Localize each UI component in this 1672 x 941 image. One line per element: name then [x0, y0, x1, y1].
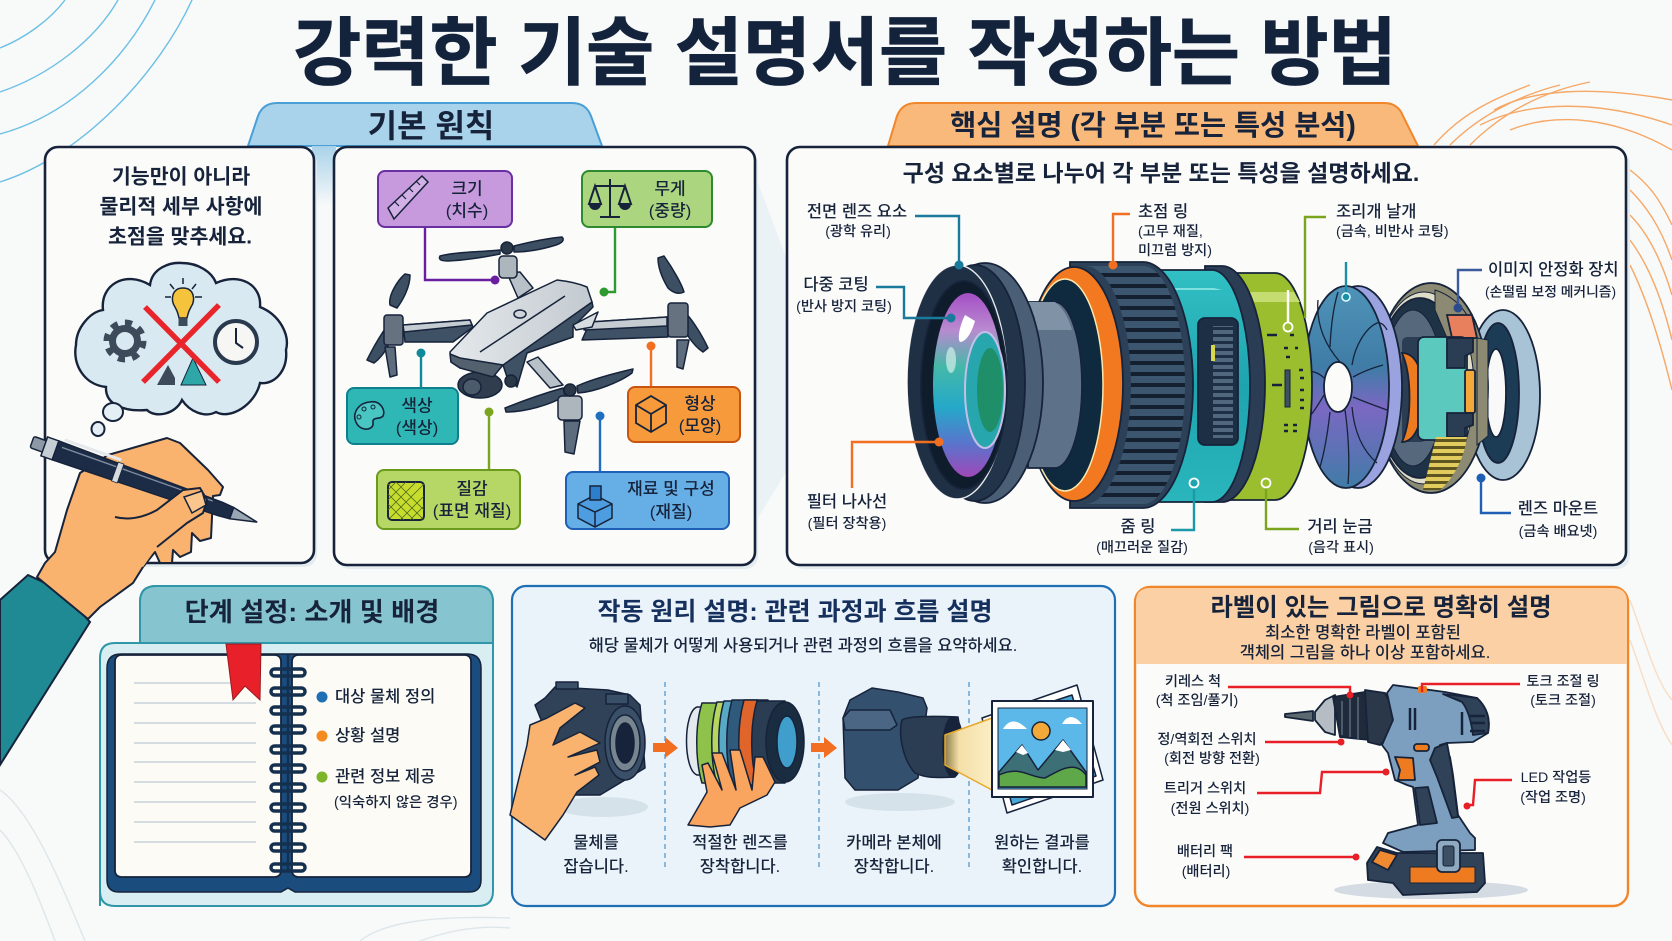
leader: battery	[1244, 854, 1360, 860]
heading band: 객체의 그림을 하나 이상 포함하세요.	[1240, 643, 1490, 662]
text: focus instruction: 물리적 세부 사항에	[99, 196, 263, 218]
leader: mount	[1476, 474, 1511, 513]
leader: trigger	[1257, 768, 1390, 793]
tab: core description	[888, 103, 1418, 146]
leader: direction switch	[1265, 738, 1344, 746]
label: multi coating	[796, 275, 892, 315]
label: lens mount: 렌즈 마운트	[1518, 499, 1598, 518]
label: step 4	[994, 833, 1090, 876]
part: orange filter ring	[1025, 267, 1123, 501]
part: lens mount	[1466, 310, 1540, 480]
leader: stabilizer	[1454, 270, 1482, 312]
text: focus instruction	[99, 166, 263, 248]
label: battery pack: 배터리 팩	[1177, 844, 1233, 860]
part: focus ring	[1070, 262, 1193, 508]
heading band: 최소한 명확한 라벨이 포함된	[1265, 623, 1461, 642]
illustration: hand writing with pen	[0, 430, 262, 765]
label: material: 재료 및 구성	[627, 480, 715, 498]
hand	[37, 438, 223, 619]
leader: torque ring	[1422, 684, 1520, 692]
label: direction switch: (회전 방향 전환)	[1164, 751, 1260, 767]
connector: size	[425, 227, 500, 284]
list: intro items: (익숙하지 않은 경우)	[334, 794, 458, 811]
leader: focus ring	[1108, 214, 1130, 270]
connector: texture	[484, 408, 494, 470]
label: focus ring: 미끄럼 방지)	[1138, 243, 1212, 259]
label: texture: 질감	[456, 480, 488, 498]
label: step 2	[692, 833, 788, 876]
label: filter thread: 필터 나사선	[807, 492, 887, 511]
heading band: 라벨이 있는 그림으로 명확히 설명	[1210, 594, 1552, 622]
text: how it works instruction: 해당 물체가 어떻게 사용되거나 관련 과정의 흐름을 요약하세요.	[589, 637, 1017, 655]
label: step 2: 적절한 렌즈를	[692, 833, 788, 852]
label: shape: (모양)	[679, 416, 721, 436]
label: step 1: 물체를	[573, 833, 619, 852]
arrow: step 1 to 2	[653, 737, 678, 758]
connector: colour	[416, 348, 426, 388]
label: multi coating: 다중 코팅	[803, 275, 869, 294]
illustration: hand attaching lens	[686, 700, 804, 827]
label: torque ring: 토크 조절 링	[1526, 674, 1600, 690]
text: panel instruction: 구성 요소별로 나누어 각 부분 또는 특성을 설명하세요.	[903, 160, 1419, 186]
leader: filter thread	[852, 438, 944, 488]
label: zoom ring	[1096, 517, 1188, 556]
label: multi coating: (반사 방지 코팅)	[796, 299, 892, 315]
body	[503, 302, 593, 387]
label: material: (재질)	[650, 502, 692, 522]
label: torque ring	[1526, 674, 1600, 709]
label: aperture blades: (금속, 비반사 코팅)	[1336, 224, 1449, 240]
label: LED work light: LED 작업등	[1521, 770, 1591, 786]
part: distance scale ring	[1228, 273, 1312, 500]
label: front element: (광학 유리)	[825, 224, 891, 240]
label: size: 크기	[451, 180, 483, 198]
label: weight: (중량)	[649, 202, 691, 220]
label: lens mount	[1518, 499, 1598, 540]
leader: zoom ring	[1171, 478, 1198, 530]
arms	[403, 320, 473, 342]
label: image stabilizer	[1485, 260, 1619, 300]
label: direction switch	[1157, 732, 1260, 767]
illustration: spiral notebook	[107, 644, 481, 892]
label: size	[378, 171, 512, 227]
rear propeller	[439, 250, 500, 261]
connector: material	[596, 412, 604, 472]
tab: core description: 핵심 설명 (각 부분 또는 특성 분석)	[950, 110, 1356, 142]
text: focus instruction: 기능만이 아니라	[112, 166, 250, 188]
icon: thought cloud with crossed abstract ideas	[75, 263, 287, 436]
panel: focus on physical details	[45, 147, 317, 567]
leader: front element	[915, 216, 964, 270]
label: zoom ring: 줌 링	[1121, 517, 1155, 536]
heading band	[1136, 588, 1627, 664]
label: direction switch: 정/역회전 스위치	[1157, 732, 1257, 748]
heading: set the stage	[140, 586, 493, 643]
label: LED work light	[1520, 770, 1591, 806]
label: battery pack	[1177, 844, 1233, 880]
left propeller	[390, 274, 410, 308]
label: distance scale	[1307, 517, 1374, 556]
icon: bookmark	[226, 644, 261, 700]
label: front element: 전면 렌즈 요소	[807, 202, 907, 221]
label: focus ring: (고무 재질,	[1138, 224, 1203, 240]
label: filter thread: (필터 장착용)	[808, 516, 886, 532]
list: intro items	[316, 687, 458, 811]
label: aperture blades	[1336, 202, 1449, 240]
leader: aperture	[1284, 217, 1350, 332]
label: material	[566, 472, 729, 529]
label: lens mount: (금속 배요넷)	[1519, 524, 1597, 540]
title: 강력한 기술 설명서를 작성하는 방법	[293, 12, 1397, 94]
label: step 3	[846, 833, 942, 876]
part: aperture blades	[1303, 286, 1402, 488]
illustration: hand holding camera	[510, 682, 648, 840]
label: trigger switch: 트리거 스위치	[1164, 781, 1246, 797]
part: zoom ring	[1155, 266, 1265, 502]
part: image stabilizer	[1389, 282, 1489, 494]
heading: how it works: 작동 원리 설명: 관련 과정과 흐름 설명	[597, 598, 993, 626]
label: step 3: 장착합니다.	[854, 857, 934, 876]
list: intro items: 상황 설명	[335, 726, 400, 745]
label: weight: 무게	[654, 180, 686, 198]
illustration: cordless drill	[1285, 685, 1528, 899]
label: trigger switch	[1164, 781, 1249, 817]
label: focus ring	[1138, 202, 1212, 259]
heading: set the stage: 단계 설정: 소개 및 배경	[185, 597, 439, 627]
label: distance scale: (음각 표시)	[1308, 540, 1374, 556]
thumbnail	[184, 491, 206, 513]
label: battery pack: (배터리)	[1182, 864, 1230, 880]
leader: coating	[876, 287, 956, 322]
label: image stabilizer: (손떨림 보정 메커니즘)	[1485, 284, 1616, 300]
text: focus instruction: 초점을 맞추세요.	[108, 226, 252, 248]
dividers	[665, 682, 969, 870]
label: size: (치수)	[446, 202, 488, 220]
label: step 4: 확인합니다.	[1002, 857, 1082, 876]
front propeller	[505, 388, 565, 412]
panel: labeled illustration	[1135, 587, 1628, 906]
illustration: exploded camera lens	[907, 262, 1540, 508]
connector: shape	[646, 342, 656, 387]
label: focus ring: 초점 링	[1138, 202, 1188, 221]
thumb	[115, 488, 207, 567]
label: front element	[807, 202, 907, 240]
label: step 4: 원하는 결과를	[994, 833, 1090, 852]
label: shape: 형상	[684, 394, 716, 414]
leader: keyless chuck	[1228, 687, 1354, 698]
illustration: camera with lens attached	[843, 688, 963, 811]
tab: basic principles: 기본 원칙	[368, 108, 494, 144]
illustration: drone	[367, 237, 708, 454]
label: weight	[582, 171, 712, 227]
label: LED work light: (작업 조명)	[1520, 790, 1586, 806]
sleeve	[0, 575, 90, 765]
label: texture: (표면 재질)	[433, 502, 511, 520]
label: filter thread	[807, 492, 887, 532]
label: step 1	[563, 833, 629, 876]
label: zoom ring: (매끄러운 질감)	[1096, 540, 1188, 556]
label: texture	[377, 470, 520, 529]
label: step 3: 카메라 본체에	[846, 833, 942, 852]
label: step 2: 장착합니다.	[700, 857, 780, 876]
label: keyless chuck	[1156, 674, 1238, 709]
label: step 1: 잡습니다.	[563, 857, 629, 876]
illustration: result photos with light beam	[945, 685, 1103, 813]
tab: basic principles	[248, 103, 602, 206]
label: distance scale: 거리 눈금	[1307, 517, 1373, 536]
label: keyless chuck: (척 조임/풀기)	[1156, 693, 1238, 709]
pen	[29, 430, 262, 532]
label: keyless chuck: 키레스 척	[1165, 674, 1221, 690]
part: front element	[907, 263, 1043, 503]
label: colour: (색상)	[396, 418, 438, 438]
panel: how it works	[510, 586, 1115, 906]
label: torque ring: (토크 조절)	[1530, 693, 1596, 709]
label: aperture blades: 조리개 날개	[1336, 202, 1416, 221]
label: shape	[628, 387, 740, 442]
panel: drone attributes	[334, 147, 758, 569]
panel: lens breakdown	[787, 147, 1630, 569]
list: intro items: 관련 정보 제공	[335, 767, 435, 786]
connector: weight	[600, 227, 615, 296]
label: trigger switch: (전원 스위치)	[1171, 801, 1249, 817]
right propeller	[658, 256, 684, 293]
label: image stabilizer: 이미지 안정화 장치	[1488, 260, 1619, 279]
label: colour: 색상	[401, 396, 433, 416]
panel: set the stage	[100, 586, 493, 906]
leader: LED	[1464, 780, 1512, 810]
label: colour	[347, 388, 458, 444]
list: intro items: 대상 물체 정의	[335, 687, 435, 706]
leader: distance scale	[1262, 478, 1299, 529]
arrow: step 2 to 3	[811, 737, 837, 758]
